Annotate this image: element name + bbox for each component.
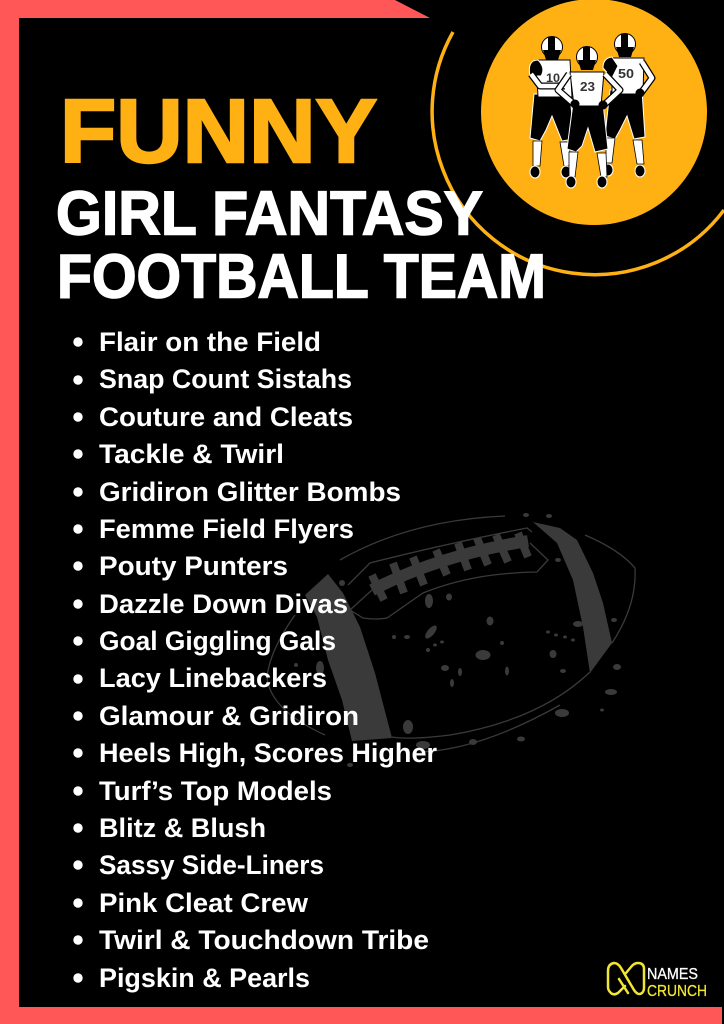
team names list: Dazzle Down Divas (99, 589, 348, 619)
jersey numbers: 10 (546, 71, 560, 85)
team names list: Flair on the Field (99, 327, 321, 357)
team names list: Pouty Punters (99, 551, 288, 581)
team names list: Twirl & Touchdown Tribe (99, 925, 429, 955)
team names list: Glamour & Gridiron (99, 701, 359, 731)
football watermark (267, 513, 635, 767)
team names list: Pink Cleat Crew (99, 888, 309, 918)
team names list: Blitz & Blush (99, 813, 266, 843)
team names list (73, 327, 437, 993)
heading: funny: FUNNY (60, 82, 377, 182)
jersey numbers (546, 66, 634, 94)
player 10 (529, 36, 574, 178)
team names list: Lacy Linebackers (99, 663, 327, 693)
football laces (372, 533, 528, 600)
team names list: Gridiron Glitter Bombs (99, 477, 401, 507)
football outlines (267, 516, 635, 752)
decorative ring (432, 32, 724, 275)
team names list: Tackle & Twirl (99, 439, 284, 469)
team names list: Snap Count Sistahs (99, 364, 352, 394)
icon: three football players (529, 34, 652, 188)
logo: names crunch: CRUNCH (647, 983, 707, 1000)
jersey numbers: 50 (618, 66, 634, 81)
logo wordmark: NAMES (647, 966, 698, 983)
team names list: Goal Giggling Gals (99, 626, 336, 656)
title (56, 82, 546, 312)
yellow circle (481, 0, 707, 225)
team names list: Heels High, Scores Higher (99, 738, 437, 768)
team names list: Pigskin & Pearls (99, 963, 310, 993)
icon: logo N mark (608, 963, 644, 994)
heading: girl fantasy: GIRL FANTASY (56, 180, 483, 248)
player 50 (603, 34, 652, 177)
heading: football team: FOOTBALL TEAM (57, 242, 546, 312)
team names list: Turf’s Top Models (99, 776, 332, 806)
jersey numbers: 23 (580, 79, 595, 94)
team names list: Sassy Side-Liners (99, 850, 324, 880)
football stripes (305, 574, 392, 741)
team names list: Couture and Cleats (99, 402, 353, 432)
logo: names crunch (608, 963, 707, 1000)
football paint splatter (294, 513, 621, 767)
team names list: Femme Field Flyers (99, 514, 354, 544)
player 23 (558, 46, 620, 188)
